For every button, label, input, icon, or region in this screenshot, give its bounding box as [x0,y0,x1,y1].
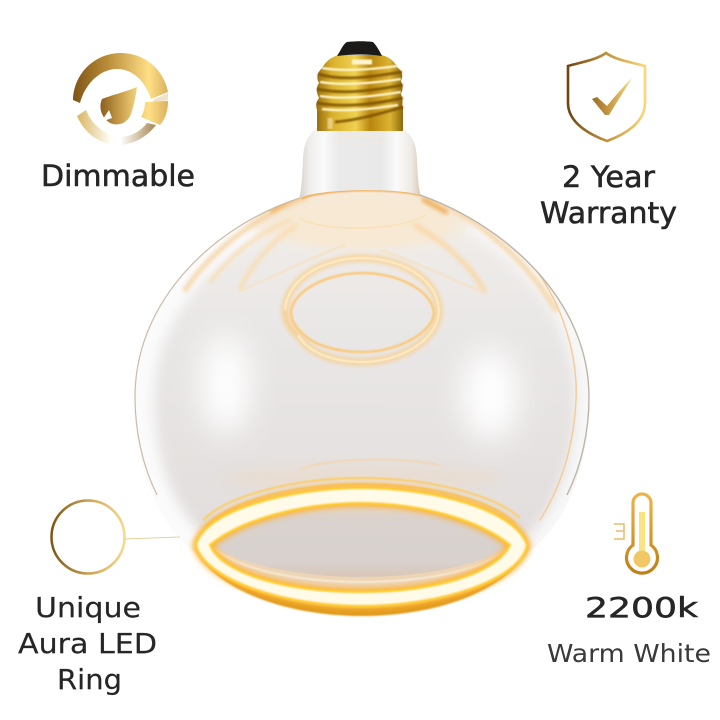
lower haze [300,460,441,470]
text: aura ring: Ring [57,663,122,696]
bulb neck [299,130,421,199]
text: warm white: Warm White [547,639,711,668]
check mark [592,78,632,115]
black contact cap [337,41,382,56]
heading: warranty: 2 Year [562,160,655,194]
text: aura ring: Unique [35,591,141,624]
thread shadows [317,72,403,122]
heading: dimmable: Dimmable [41,159,195,193]
streak reflections [210,220,290,282]
reflected filament ring [285,258,439,362]
top warm dome [248,203,470,250]
globe outline [135,198,300,495]
screw base [316,41,403,131]
side highlights [202,335,250,435]
heading: warranty: Warranty [540,196,677,230]
callout: aura ring [52,500,180,574]
text: colour temperature: 2200k [585,591,699,624]
LED ring [196,478,527,606]
warm lower band [196,488,527,606]
orange inner rim line [536,272,577,521]
pale glass rim band [136,220,257,552]
thread highlights [320,62,401,129]
icon: ring [52,500,124,574]
bottom gold edge [192,545,531,616]
icon: thermometer [614,494,658,573]
icon: warranty shield [568,53,645,141]
glass rim below hole [212,547,508,582]
tick marks [614,524,624,539]
neck inner rim [334,136,386,144]
connector line [124,537,180,539]
text: aura ring: Aura LED [18,627,157,660]
heading: warranty [540,160,677,230]
bulb glass globe [138,190,586,552]
ring hole glass floor [212,503,508,577]
text: aura ring [18,591,157,696]
icon: dimmable [73,53,168,145]
bulb [130,41,595,620]
shoulder orange fringe [185,190,576,520]
